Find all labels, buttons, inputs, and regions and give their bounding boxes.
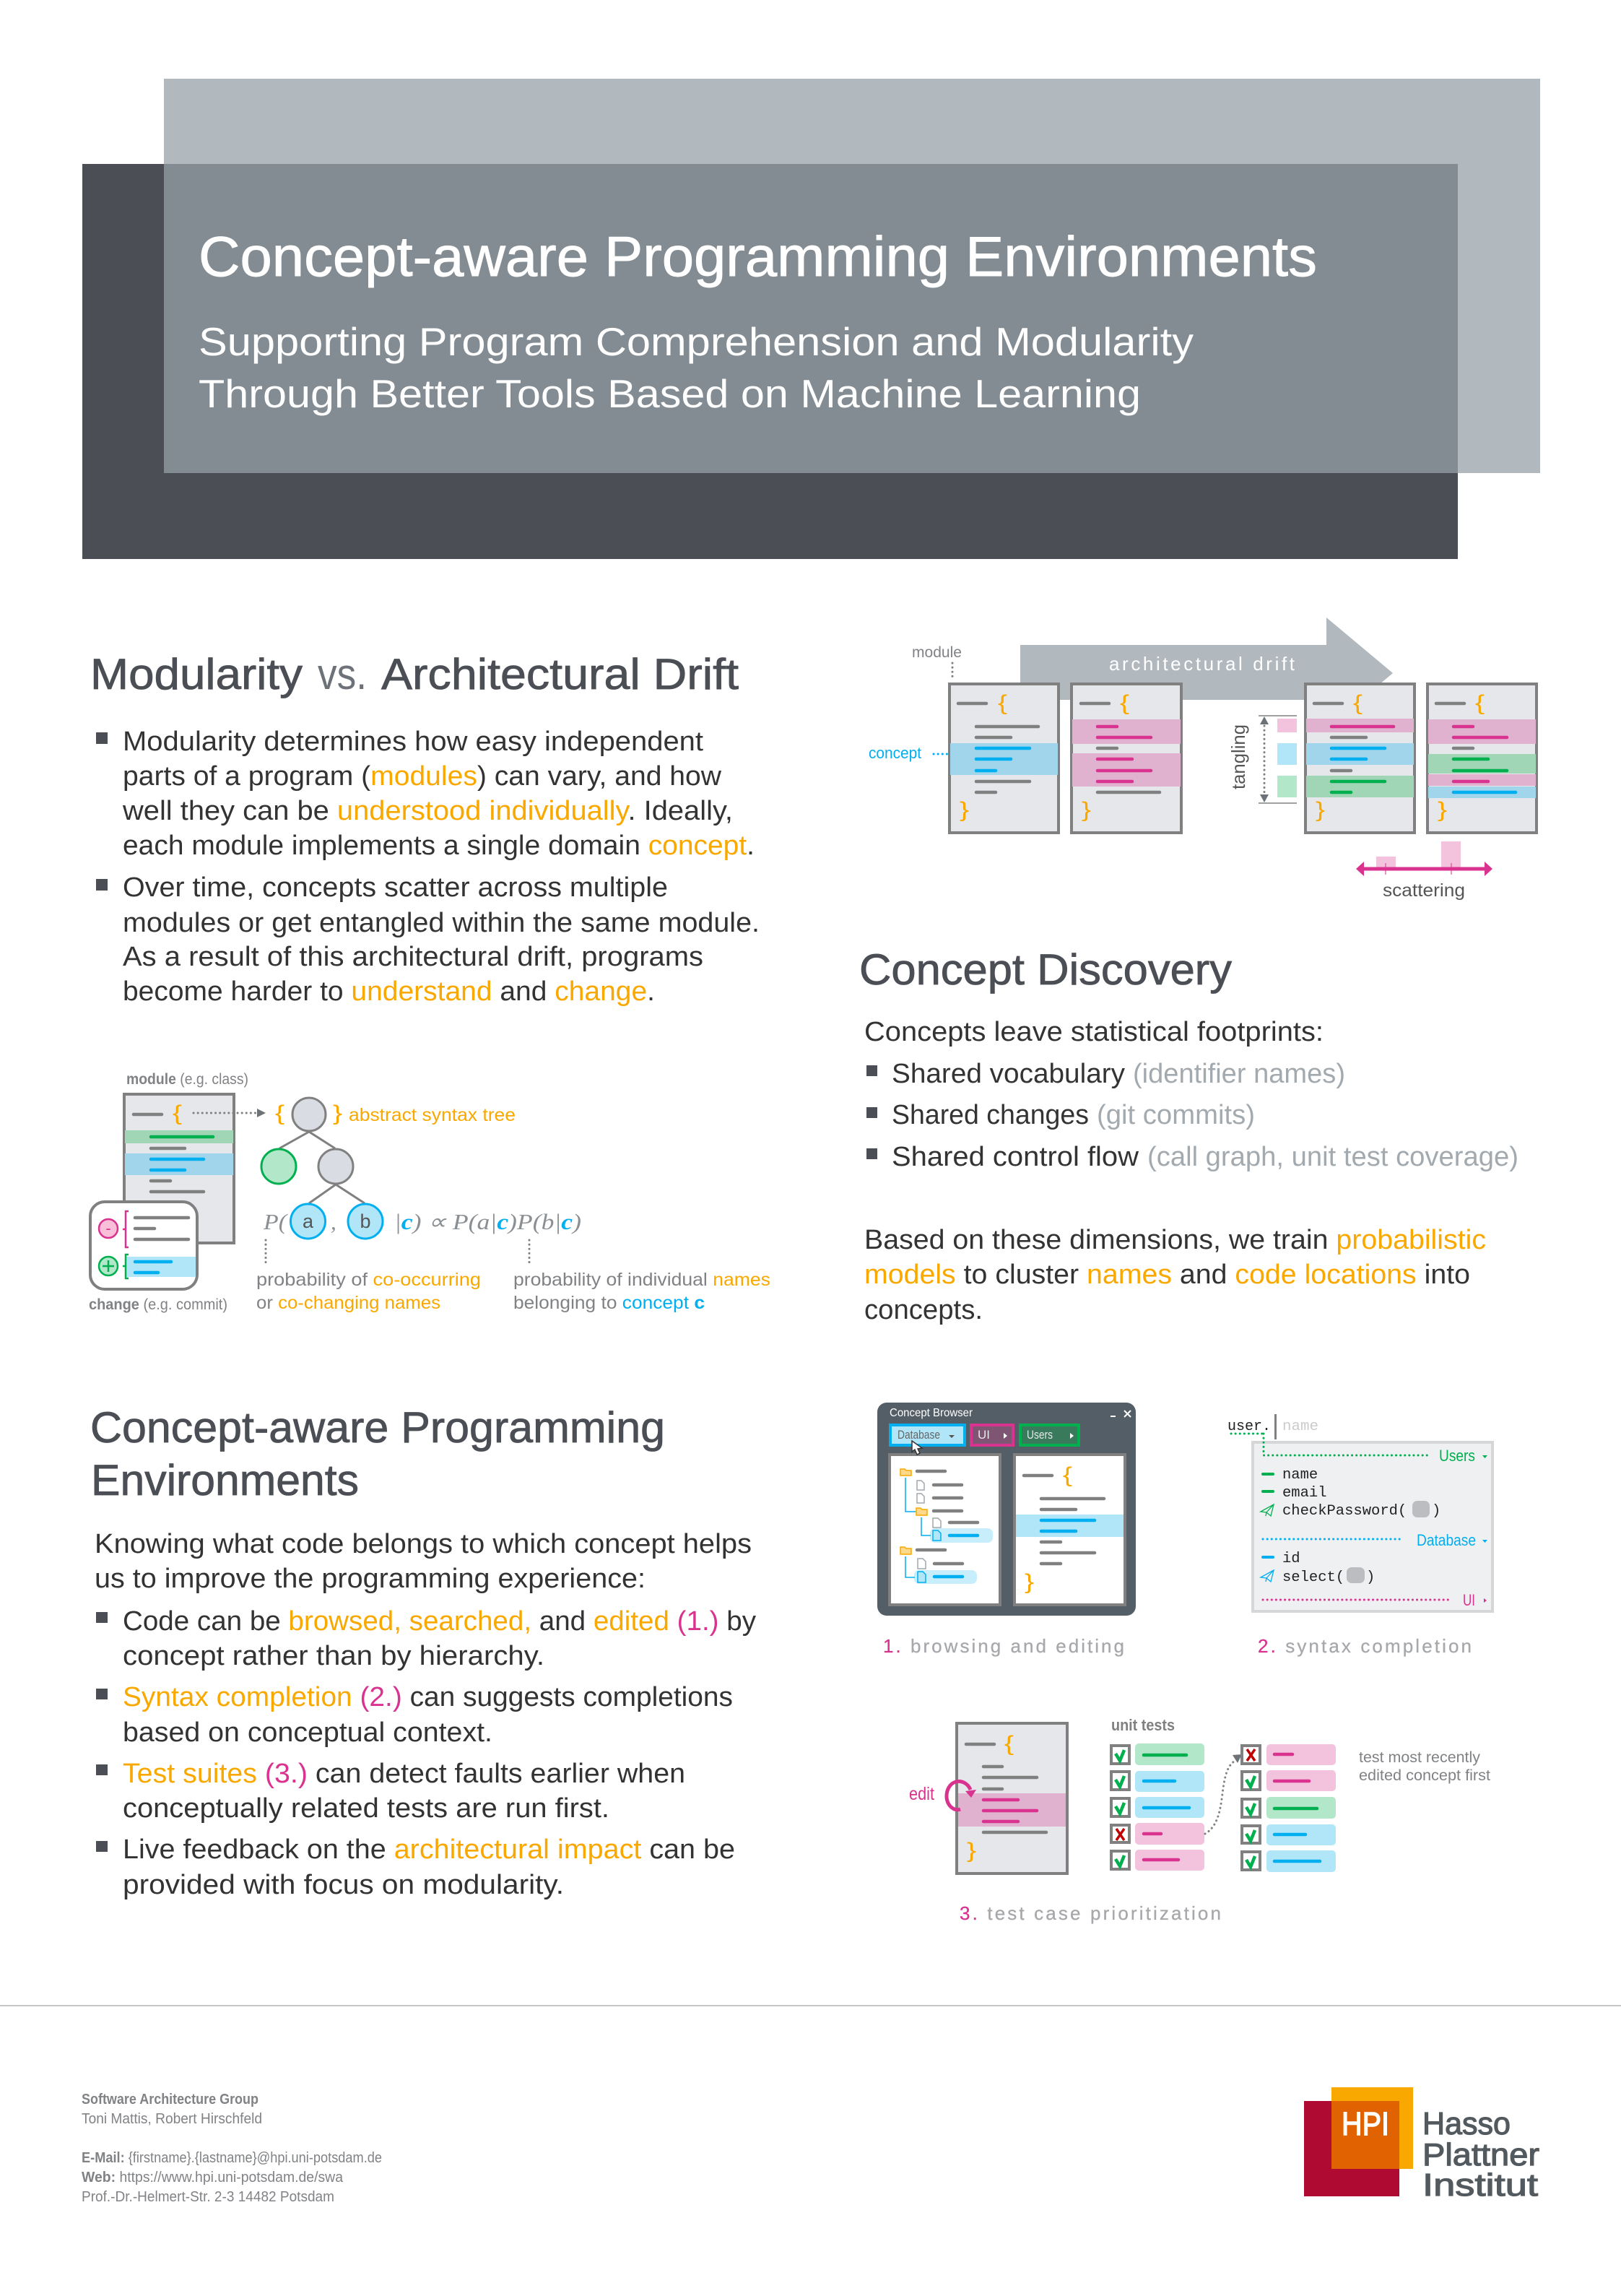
module 2: } [1082,798,1091,822]
text block: concept discovery: Concepts leave statistical footprints: [864,1017,1324,1047]
module (e.g. class): module (e.g. class) [126,1071,248,1088]
label: tangling [1227,716,1297,803]
group: database: id [1282,1551,1300,1567]
footer: contact details [82,2092,382,2205]
group: database: select( [1282,1569,1344,1586]
unit tests before: unit tests [1111,1716,1175,1734]
button: users [1020,1425,1079,1445]
panel: test case prioritization [909,1716,1490,1873]
unit tests after [1242,1744,1336,1872]
label: concept [869,744,960,762]
text block: concept discovery: Based on these dimensions, we train probabilistic [864,1225,1486,1255]
text block: programming experience bullets: Code can be browsed, searched, and edited (1.) by [123,1606,756,1637]
text block: concept discovery: (git commits) [1097,1100,1255,1130]
text block: programming experience bullets: provided with focus on modularity. [123,1870,564,1900]
button: database [890,1425,965,1445]
logo: Hasso Plattner Institut: Plattner [1422,2137,1539,2172]
group: users: checkPassword( [1282,1503,1407,1520]
group: database: ) [1366,1569,1375,1586]
text block: modularity bullets: modules or get entangled within the same module. [123,908,760,938]
caption: individual names: probability of individual names [513,1270,770,1290]
module 2: { [1120,691,1129,715]
text block: concept discovery: Shared changes [892,1100,1089,1130]
group: users [1261,1447,1487,1520]
text block: concept discovery [864,1017,1518,1325]
module 4: { [1475,691,1485,715]
logo: Hasso Plattner Institut [1304,2087,1539,2203]
group: users: name [1282,1467,1318,1483]
probability formula: P( [263,1209,288,1234]
logo: Hasso Plattner Institut: HPI [1342,2105,1389,2142]
text block: programming experience bullets: conceptually related tests are run first. [123,1793,609,1824]
text block: concept discovery: (identifier names) [1133,1059,1345,1089]
panel: syntax completion: user. [1227,1418,1271,1435]
footer: contact details: Prof.-Dr.-Helmert-Str. 2-3 14482 Potsdam [82,2189,334,2205]
change card: change (e.g. commit) [89,1296,227,1313]
arrow: reprioritize [1205,1754,1242,1834]
label: tangling: tangling [1227,724,1249,789]
probability formula: a [303,1210,314,1232]
code panel [1014,1455,1125,1605]
caption: test case prioritization: 3. test case prioritization [960,1902,1221,1924]
module 1: { [998,691,1007,715]
heading: concept-aware programming environments: Environments [91,1456,359,1504]
edit marker: edit [909,1784,934,1804]
text block: modularity bullets: As a result of this architectural drift, programs [123,942,703,972]
logo: Hasso Plattner Institut: Hasso [1422,2106,1511,2141]
module 3: { [1353,691,1363,715]
diagram: module, syntax tree and probability [89,1071,770,1313]
module 4: } [1438,798,1447,822]
footer: contact details: Software Architecture Group [82,2092,258,2107]
heading: modularity vs architectural drift [90,650,739,698]
edited module: { [1004,1732,1014,1756]
diagram: architectural drift [869,618,1537,901]
edit marker [909,1781,976,1810]
group: users: Users [1439,1447,1475,1465]
icon: cursor [912,1441,922,1455]
label: scattering [1356,841,1492,901]
button: UI [971,1425,1013,1445]
heading: modularity vs architectural drift: Modularity [90,650,303,698]
module (e.g. class) [124,1071,248,1243]
text block: concept discovery: (call graph, unit test coverage) [1147,1142,1518,1172]
text block: modularity bullets [96,727,760,1007]
panel: concept browser: Concept Browser [890,1407,973,1419]
module 1 [949,684,1059,833]
abstract syntax tree: abstract syntax tree [349,1105,516,1125]
caption: individual names: belonging to concept c [513,1293,705,1313]
change card: - [105,1219,111,1237]
note: test most recently edited concept first: test most recently [1359,1749,1480,1766]
footer: contact details: E-Mail: {firstname}.{lastname}@hpi.uni-potsdam.de [82,2150,382,2166]
heading: modularity vs architectural drift: vs. [318,650,367,698]
label: module: module [912,644,962,661]
arrow: architectural drift [1020,618,1393,729]
code panel: } [1025,1570,1034,1594]
caption: co-occurring names: probability of co-occurring [256,1270,481,1290]
note: test most recently edited concept first: edited concept first [1359,1767,1490,1784]
group: users: email [1282,1485,1327,1502]
probability formula: , [331,1209,336,1234]
button: database: Database [898,1428,940,1442]
edited module: } [967,1839,976,1863]
file tree panel [890,1455,1000,1605]
text block: programming experience bullets: Knowing what code belongs to which concept helps [95,1529,752,1559]
label: scattering: scattering [1383,880,1465,901]
footer: contact details: Web: https://www.hpi.uni-potsdam.de/swa [82,2170,344,2185]
text block: modularity bullets: Over time, concepts scatter across multiple [123,872,668,903]
text block: modularity bullets: each module implements a single domain concept. [123,831,755,861]
group: users: ) [1432,1503,1440,1520]
caption: individual names [513,1270,770,1313]
text block: programming experience bullets: Live feedback on the architectural impact can be [123,1834,735,1865]
button: users: Users [1027,1428,1053,1442]
text block: modularity bullets: well they can be understood individually . Ideally, [122,796,733,826]
text block: programming experience bullets: us to improve the programming experience: [95,1564,646,1594]
text block: modularity bullets: become harder to understand and change. [123,976,655,1007]
header banner [82,79,1540,559]
panel: concept browser [877,1403,1136,1616]
abstract syntax tree: } [333,1101,342,1125]
module 4 [1427,684,1537,833]
change card [89,1202,227,1313]
text block: programming experience bullets: concept rather than by hierarchy. [123,1641,544,1671]
logo: Hasso Plattner Institut: Institut [1422,2167,1538,2203]
module 1: } [960,798,969,822]
group: database: Database [1417,1531,1476,1549]
heading: concept-aware programming environments: Concept-aware Programming [90,1403,665,1452]
heading: modularity vs architectural drift: Architectural Drift [381,650,739,698]
text block: concept discovery: Shared vocabulary [892,1059,1125,1089]
group: UI: UI [1463,1591,1475,1609]
label: module [912,644,962,678]
text block: programming experience bullets: based on conceptual context. [123,1717,492,1748]
abstract syntax tree [261,1098,516,1203]
subtitle [199,319,1194,416]
arrow: architectural drift: architectural drift [1109,653,1295,675]
subtitle: Supporting Program Comprehension and Modularity [199,319,1194,364]
caption: co-occurring names: or co-changing names [256,1293,440,1313]
module (e.g. class): { [173,1101,182,1125]
heading: concept-aware programming environments [90,1403,665,1504]
unit tests before [1111,1716,1204,1871]
dotted arrow to tree [194,1109,266,1117]
caption: browsing and editing: 1. browsing and editing [883,1635,1124,1657]
module 3 [1305,684,1414,833]
title: Concept-aware Programming Environments [199,225,1317,288]
probability formula: b [360,1210,371,1232]
button: UI: UI [978,1428,990,1442]
text block: modularity bullets: parts of a program (modules) can vary, and how [123,761,722,792]
note: test most recently edited concept first [1359,1749,1490,1784]
panel: syntax completion: name [1282,1418,1318,1435]
module 3: } [1316,798,1325,822]
probability formula: |c) ∝ P(a| c)P(b| c) [394,1209,581,1234]
text block: concept discovery: Shared control flow [892,1142,1139,1172]
text block: modularity bullets: Modularity determines how easy independent [123,727,703,757]
group: database [1261,1531,1487,1586]
heading: concept discovery: Concept Discovery [859,945,1232,994]
panel: syntax completion [1227,1414,1492,1611]
caption: co-occurring names [256,1270,481,1313]
label: concept: concept [869,744,921,762]
probability formula [263,1204,581,1265]
abstract syntax tree: { [275,1101,284,1125]
text block: programming experience bullets [95,1529,756,1900]
edited module [957,1723,1067,1873]
text block: concept discovery: concepts. [864,1295,983,1325]
module 2 [1072,684,1181,833]
group: UI [1263,1591,1487,1609]
text block: concept discovery: models to cluster names and code locations into [864,1260,1470,1290]
text block: programming experience bullets: Test suites (3.) can detect faults earlier when [123,1759,685,1789]
caption: syntax completion: 2. syntax completion [1258,1635,1472,1657]
code panel: { [1063,1463,1072,1487]
text block: programming experience bullets: Syntax completion (2.) can suggests completions [123,1682,733,1712]
subtitle: Through Better Tools Based on Machine Learning [199,371,1141,416]
footer: contact details: Toni Mattis, Robert Hirschfeld [82,2111,262,2127]
